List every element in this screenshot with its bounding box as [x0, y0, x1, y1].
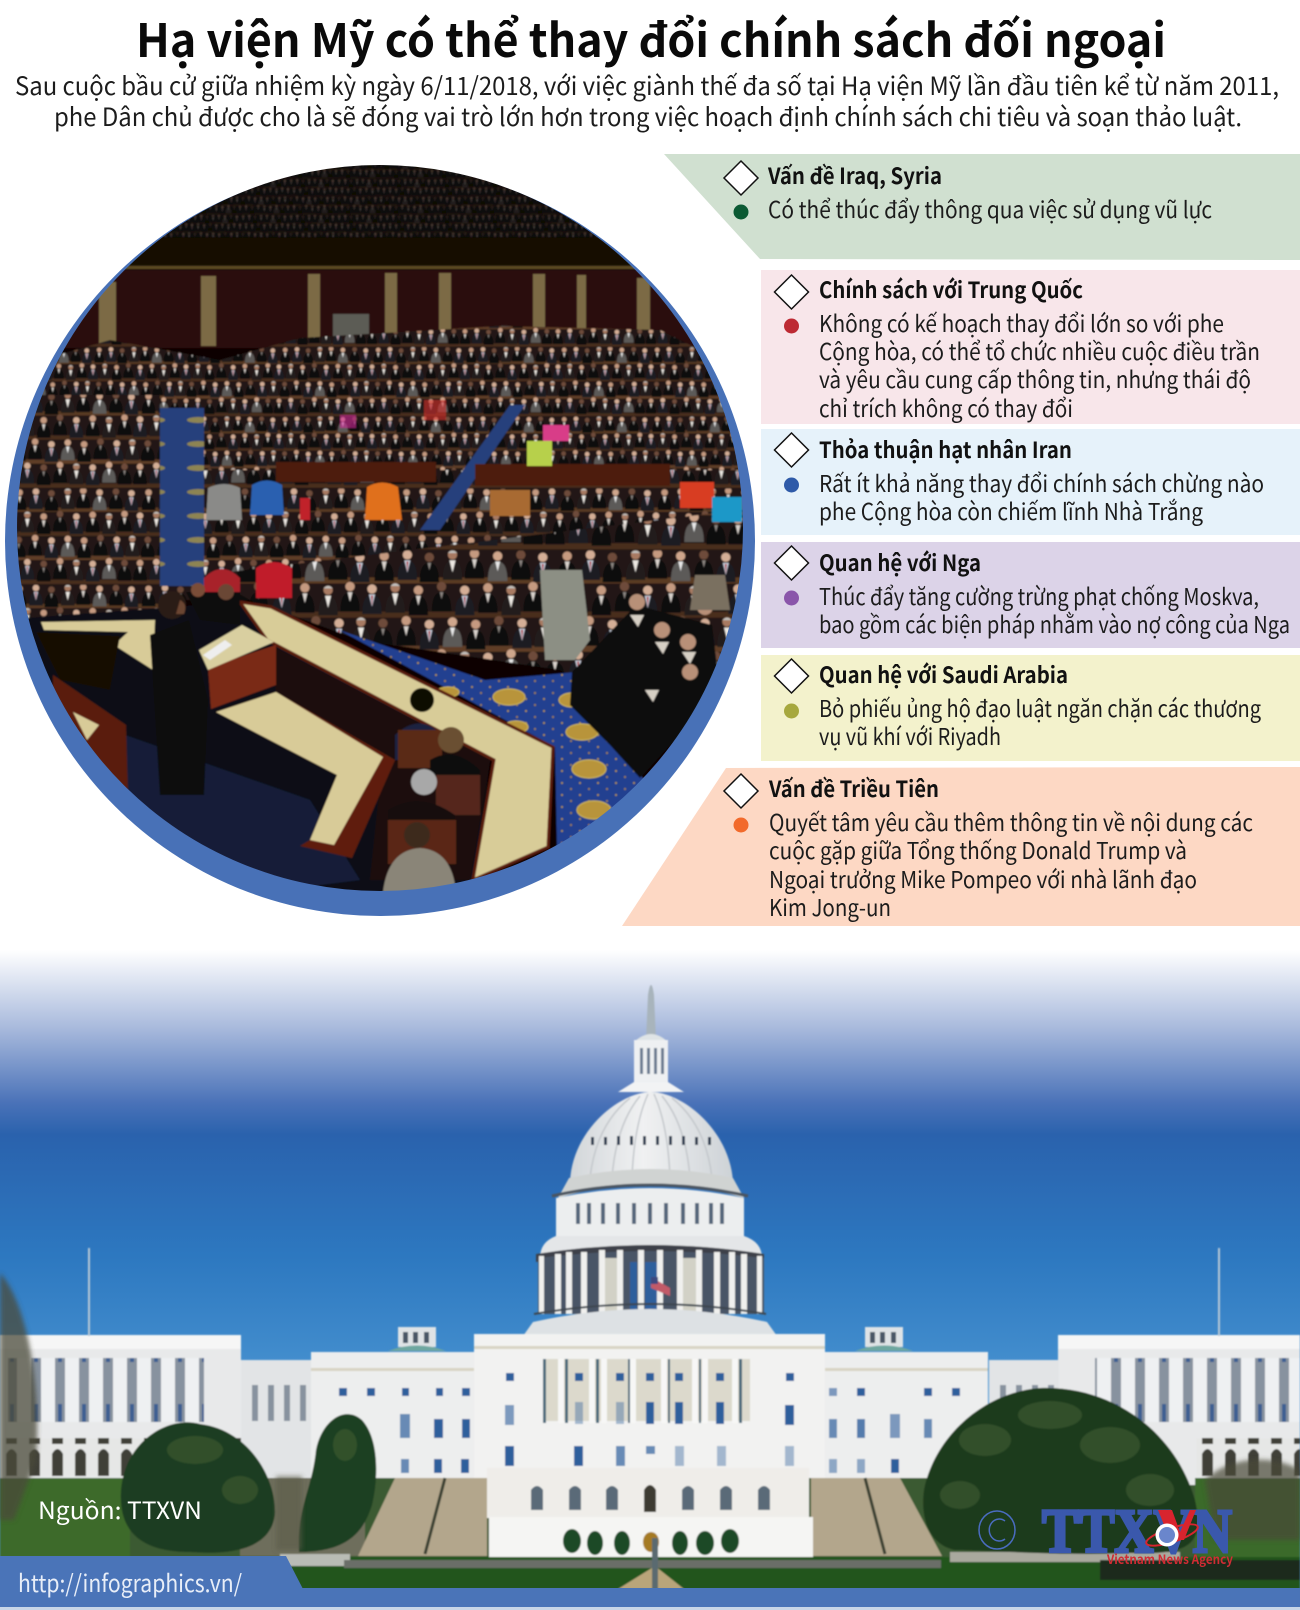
- body text: chỉ trích không có thay đổi: [819, 390, 1073, 424]
- icon: diamond: [774, 433, 808, 467]
- body text: cuộc gặp giữa Tổng thống Donald Trump và: [769, 832, 1187, 866]
- aisles: [160, 408, 204, 586]
- bullet dot: [784, 478, 799, 492]
- logo letters: TTXVN: [1042, 1498, 1232, 1566]
- intro text: [15, 67, 1279, 134]
- rostrum cream strip: [240, 602, 553, 880]
- panel: Iran nuclear deal: [761, 429, 1300, 535]
- intro text: Sau cuộc bầu cử giữa nhiệm kỳ ngày 6/11/2018, với việc giành thế đa số tại Hạ viện Mỹ lần đầu tiên kể từ năm 2011,: [15, 67, 1279, 103]
- body text: Rất ít khả năng thay đổi chính sách chừng nào: [819, 465, 1264, 499]
- central terrace: [487, 1468, 813, 1558]
- back wall: [60, 270, 710, 348]
- chamber photo: [0, 160, 760, 900]
- body text: Kim Jong-un: [769, 889, 891, 923]
- trees: [121, 1388, 1198, 1554]
- body text: Không có kế hoạch thay đổi lớn so với phe: [819, 305, 1224, 339]
- blue ring: [5, 166, 755, 916]
- intro text: phe Dân chủ được cho là sẽ đóng vai trò lớn hơn trong việc hoạch định chính sách chi tiêu và soạn thảo luật.: [54, 98, 1242, 134]
- seated people: [383, 688, 480, 892]
- body text: [819, 465, 1264, 527]
- front row: [232, 510, 743, 673]
- red V mark: [1158, 1510, 1196, 1540]
- body text: Cộng hòa, có thể tổ chức nhiều cuộc điều trần: [819, 333, 1260, 367]
- url tab: [0, 1556, 303, 1589]
- stairs: [358, 1478, 942, 1556]
- panel: North Korea: [622, 767, 1300, 926]
- body text: phe Cộng hòa còn chiếm lĩnh Nhà Trắng: [819, 493, 1203, 527]
- footer bar: [0, 1556, 1300, 1610]
- main facade: [311, 1334, 988, 1478]
- bullet dot: [734, 818, 748, 832]
- circular photo: House chamber: [0, 160, 760, 916]
- desks: [276, 462, 436, 482]
- upper rostrum: [41, 620, 155, 670]
- icon: diamond: [774, 275, 808, 309]
- logo: TTXVN: [979, 1498, 1233, 1568]
- heading: Quan hệ với Saudi Arabia: [819, 658, 1068, 690]
- heading: Vấn đề Iraq, Syria: [767, 159, 942, 191]
- body text: Có thể thúc đẩy thông qua việc sử dụng vũ lực: [768, 191, 1212, 225]
- source label: Nguồn: TTXVN: [38, 1491, 202, 1526]
- bullet dot: [784, 704, 799, 718]
- body text: [769, 804, 1253, 923]
- lawn and terrace wall: [0, 1478, 1300, 1589]
- carpet: [339, 630, 650, 850]
- agency name: Vietnam News Agency: [1106, 1549, 1233, 1568]
- body text: và yêu cầu cung cấp thông tin, nhưng thái độ: [819, 361, 1251, 395]
- panel: Russia relations: [761, 542, 1300, 648]
- url text: http://infographics.vn/: [18, 1564, 243, 1599]
- body text: Ngoại trưởng Mike Pompeo với nhà lãnh đạo: [769, 861, 1197, 895]
- panel: Iraq, Syria: [664, 154, 1300, 260]
- heading: Quan hệ với Nga: [819, 546, 981, 578]
- coloured dress accents: [204, 400, 742, 598]
- title: Hạ viện Mỹ có thể thay đổi chính sách đối ngoại: [136, 5, 1166, 71]
- body text: Quyết tâm yêu cầu thêm thông tin về nội dung các: [769, 804, 1253, 838]
- heading: Thỏa thuận hạt nhân Iran: [819, 433, 1072, 465]
- body text: [819, 305, 1260, 424]
- far wings: [0, 1248, 1300, 1485]
- icon: diamond: [774, 659, 808, 693]
- bare tree: [0, 1273, 1300, 1550]
- dome: [523, 985, 777, 1336]
- body text: [819, 690, 1261, 752]
- ground behind building: [0, 1470, 1300, 1590]
- panel: China policy: [761, 270, 1300, 424]
- globe: [1144, 1520, 1200, 1550]
- speaker: [150, 591, 208, 795]
- copyright mark: [979, 1511, 1015, 1549]
- icon: diamond: [774, 546, 808, 580]
- bullet dot: [784, 318, 799, 334]
- body text: [819, 578, 1290, 640]
- heading: Vấn đề Triều Tiên: [768, 772, 939, 804]
- icon: diamond: [724, 161, 758, 195]
- Capitol building scene: [0, 948, 1300, 1590]
- desk top: [216, 692, 395, 858]
- body text: vụ vũ khí với Riyadh: [819, 718, 1001, 752]
- sky: [0, 948, 1300, 1588]
- gallery: [162, 165, 598, 238]
- bullet dot: [784, 590, 799, 606]
- heading: Chính sách với Trung Quốc: [819, 273, 1083, 305]
- people beside speaker: [186, 592, 240, 625]
- rostrum side wood: [53, 675, 128, 795]
- crowd rows: [42, 324, 738, 472]
- bullet dot: [734, 204, 748, 220]
- icon: diamond: [724, 774, 758, 808]
- podium: [208, 645, 276, 709]
- cupolas: [388, 1327, 913, 1351]
- panel: Saudi Arabia relations: [761, 655, 1300, 761]
- dark rostrum floor: [0, 602, 490, 900]
- justices: [570, 605, 720, 778]
